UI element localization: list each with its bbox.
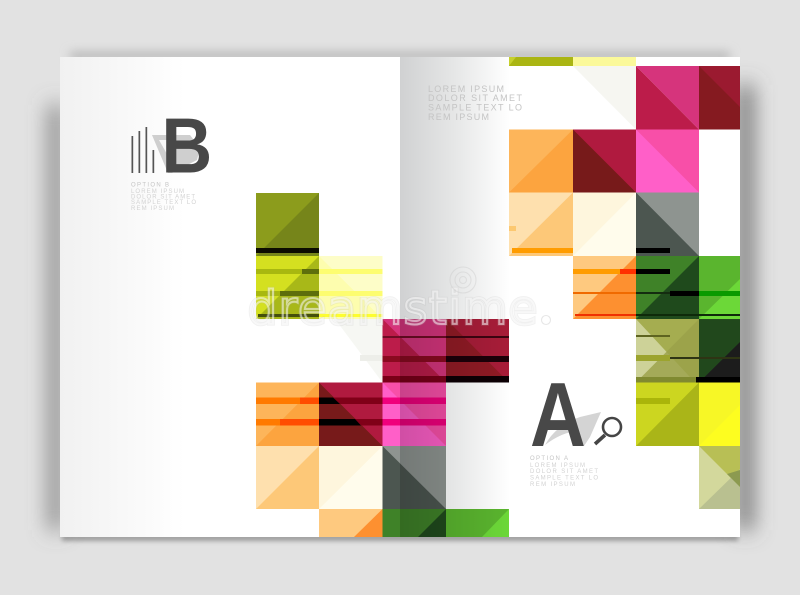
option A text block: OPTION A xyxy=(530,456,568,462)
row 3 tiles xyxy=(509,192,699,256)
bottom light green tile xyxy=(446,509,509,537)
bottom orange tile xyxy=(319,509,382,537)
pink striped tile xyxy=(382,382,446,446)
maroon striped tile xyxy=(319,382,382,446)
option B text block: LOREM IPSUM xyxy=(131,189,184,195)
watermark: dreamstime xyxy=(248,281,537,335)
fold shading on right page xyxy=(400,57,510,537)
option A text block: REM IPSUM xyxy=(530,482,575,488)
olive tile xyxy=(256,193,319,256)
option B text block: REM IPSUM xyxy=(131,206,174,212)
watermark: dreamstime xyxy=(248,281,537,335)
option A text block: DOLOR SIT AMET xyxy=(530,469,598,475)
row 1 tiles xyxy=(573,66,740,130)
faint white tile xyxy=(335,319,382,382)
pale orange tile xyxy=(256,446,319,509)
brochure left page xyxy=(60,57,400,537)
top strip xyxy=(509,57,636,66)
orange striped tile xyxy=(256,382,319,446)
central mosaic xyxy=(256,193,509,537)
right page text block: REM IPSUM xyxy=(428,112,489,122)
option B text block: DOLOR SIT AMET xyxy=(131,194,195,200)
page shadow xyxy=(50,52,752,541)
row 6 tiles xyxy=(636,382,740,446)
row 7 tile xyxy=(699,446,740,509)
option B text block xyxy=(131,182,196,212)
option B text block: SAMPLE TEXT LO xyxy=(131,200,196,206)
right page text block: DOLOR SIT AMET xyxy=(428,93,522,103)
right page text block: LOREM IPSUM xyxy=(428,84,504,94)
option A text block: LOREM IPSUM xyxy=(530,463,585,469)
crimson tile xyxy=(382,319,446,382)
bottom green tile xyxy=(382,509,446,537)
row 5 tiles xyxy=(636,319,740,382)
icon: bars and shape beside B xyxy=(132,127,200,173)
pale yellow tile xyxy=(319,256,382,319)
row 4 tiles xyxy=(573,256,740,319)
option A text block: SAMPLE TEXT LO xyxy=(530,476,598,482)
letter B: B xyxy=(162,102,212,189)
brochure right page xyxy=(400,57,740,537)
icon: swoosh behind A xyxy=(545,412,601,446)
option B text block: OPTION B xyxy=(131,182,169,188)
row 2 tiles xyxy=(509,130,699,192)
grey tile xyxy=(382,446,446,509)
letter A: A xyxy=(530,364,586,465)
icon: magnifier xyxy=(595,418,621,444)
dark red tile xyxy=(446,319,509,382)
right page text block: SAMPLE TEXT LO xyxy=(428,102,522,112)
right page text block xyxy=(428,84,522,122)
option A text block xyxy=(530,456,598,488)
right page mosaic xyxy=(509,57,740,509)
cream tile xyxy=(319,446,382,509)
lime tile xyxy=(256,256,319,319)
